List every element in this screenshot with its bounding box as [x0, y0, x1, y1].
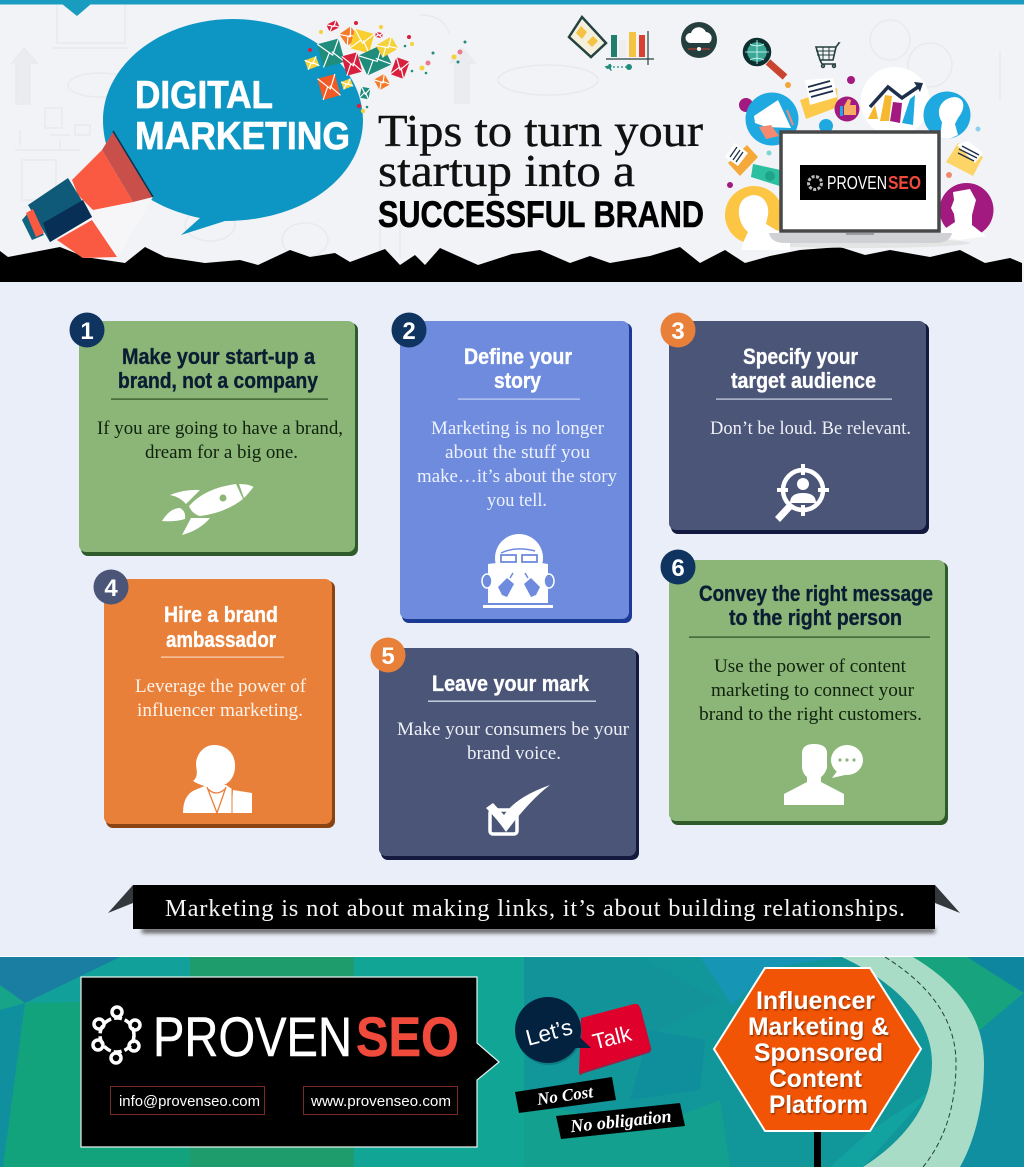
- card 3 heading: Specify your: [743, 344, 858, 369]
- badge 6: [660, 550, 696, 584]
- quote banner: Marketing is not about making links, it’s about building relationships.: [165, 895, 905, 922]
- icon: audience target: [775, 464, 829, 522]
- card 4 heading: [164, 602, 278, 652]
- let's talk speech bubbles: Talk: [590, 1020, 635, 1054]
- card 2 heading: [464, 344, 572, 393]
- icon: banknote: [751, 164, 790, 188]
- badge 3: [660, 312, 696, 348]
- card 2 heading: Define your: [464, 344, 572, 369]
- heading: digital marketing: DIGITAL: [135, 74, 273, 117]
- road sign: Marketing &: [748, 1013, 889, 1041]
- footer background: [0, 956, 1024, 1167]
- laptop: [769, 132, 952, 243]
- illustration: laptop with floating icons: [725, 67, 994, 250]
- card 4 heading: ambassador: [166, 627, 276, 652]
- card 1 text: If you are going to have a brand,: [97, 418, 343, 439]
- website box: www.provenseo.com: [310, 1093, 451, 1110]
- icon: magnifier globe: [745, 40, 785, 77]
- title: tips to turn your startup: SUCCESSFUL BRAND: [378, 194, 704, 235]
- icon: envelope letter: [800, 78, 838, 119]
- icon: person with speech bubble: [784, 744, 863, 805]
- road sign: Sponsored: [754, 1039, 883, 1067]
- road sign: Content: [769, 1065, 863, 1093]
- panel: card 6: [660, 550, 948, 825]
- email box: [110, 1086, 264, 1114]
- card 1 heading: Make your start-up a: [122, 344, 316, 369]
- card 3 heading: [731, 344, 876, 393]
- no obligation label: [556, 1103, 685, 1139]
- badge 1: 1: [80, 318, 94, 345]
- icon: chart circle: [860, 67, 930, 136]
- icon: tablet and bar chart: [569, 17, 654, 70]
- logo wordmark: SEO: [356, 1005, 459, 1068]
- icon: flying envelopes: [305, 20, 466, 113]
- card 2 text: make…it’s about the story: [417, 466, 617, 487]
- icon: megaphone: [22, 131, 153, 258]
- card 1 heading: [118, 344, 319, 393]
- icon: shopping cart: [816, 43, 839, 67]
- panel: card 2: [392, 312, 632, 623]
- no cost label: No Cost: [535, 1082, 595, 1109]
- icon: ambassador with flag: [183, 745, 252, 813]
- badge 1: [70, 312, 104, 348]
- icon: megaphone circle: [746, 92, 798, 146]
- website box: [304, 1086, 458, 1114]
- card 4 text: influencer marketing.: [137, 700, 303, 721]
- card 4 text: Leverage the power of: [135, 676, 307, 697]
- let's talk speech bubbles: Let’s: [523, 1014, 575, 1051]
- card 6 text: [699, 656, 922, 725]
- panel: card 5: [370, 638, 639, 860]
- laptop: PROVEN: [827, 173, 887, 193]
- icon: purple person: [940, 183, 994, 240]
- card 6 text: marketing to connect your: [711, 680, 915, 701]
- panel: card 4: [94, 570, 335, 828]
- icon: rocket: [162, 484, 254, 535]
- badge 3: 3: [671, 318, 685, 345]
- laptop: SEO: [888, 173, 921, 193]
- card 3 text: Don’t be loud. Be relevant.: [710, 418, 911, 439]
- contact panel: [81, 977, 499, 1147]
- badge 2: [392, 312, 426, 348]
- no obligation label: No obligation: [568, 1106, 672, 1136]
- heading: digital marketing: [135, 74, 350, 158]
- title: tips to turn your startup: startup into a: [378, 146, 635, 196]
- badge 2: 2: [402, 318, 416, 345]
- let's talk speech bubbles: [515, 997, 651, 1076]
- heading: digital marketing: MARKETING: [135, 115, 350, 158]
- email box: info@provenseo.com: [119, 1093, 260, 1110]
- card 6 heading: Convey the right message: [699, 581, 933, 606]
- card 6 heading: [699, 581, 933, 630]
- card 5 text: [397, 719, 630, 764]
- card 6 text: Use the power of content: [714, 656, 907, 677]
- icon: right envelope: [946, 141, 983, 176]
- badge 4: [94, 570, 128, 604]
- badge 5: [370, 638, 406, 672]
- card 6 heading: to the right person: [729, 605, 902, 630]
- card 5 text: Make your consumers be your: [397, 719, 630, 740]
- icon: yellow person: [725, 186, 790, 250]
- card 1 text: dream for a big one.: [145, 442, 298, 463]
- title: tips to turn your startup: Tips to turn your: [378, 106, 703, 156]
- road sign: Influencer: [756, 987, 875, 1015]
- quote banner: [108, 885, 960, 933]
- road sign: [714, 968, 921, 1167]
- speech bubble with heading: [103, 19, 363, 235]
- panel: card 3: [660, 312, 929, 534]
- panel: card 1: [70, 312, 358, 556]
- card 5 text: brand voice.: [467, 743, 561, 764]
- icon: cloud: [681, 22, 717, 58]
- card 1 text: [97, 418, 343, 463]
- card 1 heading: brand, not a company: [118, 368, 319, 393]
- title: tips to turn your startup: [378, 106, 704, 235]
- torn black edge: [0, 247, 1022, 282]
- icon: check box: [486, 785, 550, 834]
- card 4 text: [135, 676, 307, 721]
- card 3 heading: target audience: [731, 368, 876, 393]
- road with dashed centre line: [842, 957, 984, 1167]
- icon: small envelope left: [725, 143, 758, 176]
- icon: provenseo logo mark: [93, 1007, 140, 1063]
- card 2 text: [417, 418, 617, 511]
- badge 4: 4: [104, 575, 118, 602]
- badge 5: 5: [381, 643, 395, 670]
- card 2 text: Marketing is no longer: [431, 418, 605, 439]
- icon: person reading a book: [482, 534, 554, 608]
- badge 6: 6: [671, 555, 685, 582]
- icon: blue person: [924, 92, 970, 140]
- header banner: [0, 0, 1024, 282]
- card 5 heading: Leave your mark: [432, 671, 590, 696]
- card 2 text: about the stuff you: [445, 442, 590, 463]
- no cost label: [515, 1077, 616, 1113]
- card 2 text: you tell.: [487, 490, 547, 511]
- card 2 heading: story: [494, 368, 542, 393]
- logo wordmark: PROVEN: [153, 1005, 352, 1068]
- card 4 heading: Hire a brand: [164, 602, 278, 627]
- road sign: Platform: [769, 1091, 868, 1119]
- card 6 text: brand to the right customers.: [699, 704, 922, 725]
- icon: thumbs up: [834, 96, 860, 122]
